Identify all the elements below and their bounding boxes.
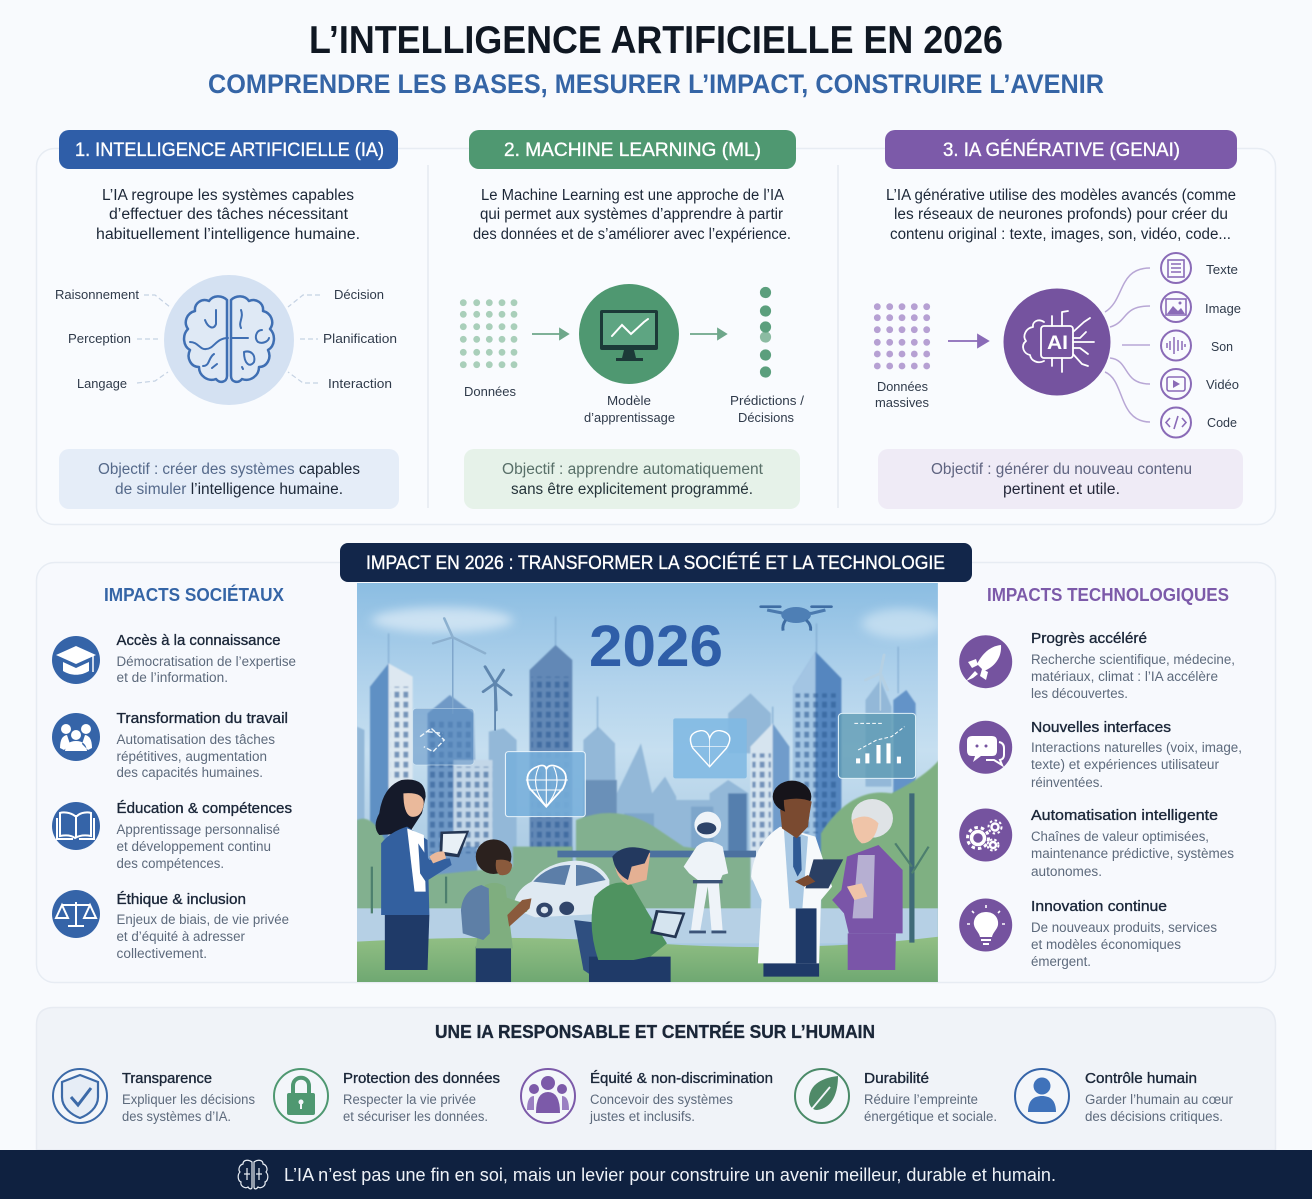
item: continuous innovation <box>959 898 1217 969</box>
item: continuous innovation: De nouveaux produits, services <box>1031 920 1217 935</box>
connectors <box>1105 268 1150 422</box>
icon: video output <box>1161 369 1191 399</box>
principle: fairness: Concevoir des systèmes <box>590 1092 733 1107</box>
diagram: brain with capabilities: Interaction <box>328 376 392 391</box>
item: intelligent automation: autonomes. <box>1031 864 1102 879</box>
heading pill: IA <box>59 130 398 169</box>
icon: sound output <box>1161 330 1191 360</box>
principle: sustainability: Durabilité <box>864 1071 929 1087</box>
text block: IA definition: d’effectuer des tâches nécessitant <box>109 206 349 223</box>
principle: fairness <box>521 1069 773 1124</box>
diagram: brain with capabilities <box>55 275 397 405</box>
item: new interfaces: texte) et expériences utilisateur <box>1031 757 1219 772</box>
text block: IA definition: L’IA regroupe les systèmes capables <box>102 187 354 204</box>
item: intelligent automation: Automatisation intelligente <box>1031 807 1218 824</box>
icon: footer brain <box>238 1160 268 1189</box>
item: ethics: collectivement. <box>116 946 207 961</box>
subtitle: COMPRENDRE LES BASES, MESURER L’IMPACT, CONSTRUIRE L’AVENIR <box>208 69 1104 99</box>
diagram: brain with capabilities: Raisonnement <box>55 287 139 302</box>
heading pill: GenAI <box>885 130 1237 169</box>
heading pill: ML: 2. MACHINE LEARNING (ML) <box>504 139 761 161</box>
text block: IA definition <box>96 187 360 243</box>
road and lawn <box>357 908 939 943</box>
data dots <box>460 299 517 368</box>
diagram: machine learning flow: Décisions <box>738 410 794 425</box>
item: continuous innovation: Innovation continue <box>1031 898 1167 915</box>
item: work transformation: Automatisation des tâches <box>116 732 275 747</box>
icon: text output <box>1161 253 1191 283</box>
item: new interfaces: Interactions naturelles (voix, image, <box>1031 740 1242 755</box>
callout: GenAI objective <box>878 449 1243 509</box>
diagram: machine learning flow: Données <box>464 384 516 399</box>
item: ethics: Éthique & inclusion <box>116 891 246 908</box>
item: work transformation <box>52 710 288 780</box>
item: new interfaces <box>959 719 1242 790</box>
principle: fairness: Équité & non-discrimination <box>590 1070 773 1087</box>
icon: image output <box>1161 292 1191 322</box>
diagram: generative flow: massives <box>875 395 929 410</box>
item: intelligent automation: Chaînes de valeur optimisées, <box>1031 829 1209 844</box>
diagram: brain with capabilities: Perception <box>68 331 131 346</box>
heading pill: GenAI: 3. IA GÉNÉRATIVE (GENAI) <box>943 138 1180 161</box>
item: ethics: et d’équité à adresser <box>116 929 245 944</box>
banner: impact heading <box>340 543 972 582</box>
text block: GenAI definition: contenu original : texte, images, son, vidéo, code... <box>890 226 1231 243</box>
footer banner <box>0 1150 1312 1199</box>
panel: fundamentals <box>36 130 1276 524</box>
diagram: machine learning flow: Modèle <box>607 393 651 408</box>
illustration: city of 2026 <box>357 583 943 982</box>
column: societal impacts <box>52 584 296 961</box>
footer banner: L’IA n’est pas une fin en soi, mais un levier pour construire un avenir meilleur, durable et humain. <box>284 1164 1056 1185</box>
callout: ML objective <box>464 449 800 509</box>
principle: fairness: justes et inclusifs. <box>589 1109 695 1124</box>
diagram: brain with capabilities: Décision <box>334 287 384 302</box>
text block: ML definition: Le Machine Learning est une approche de l’IA <box>481 187 785 204</box>
text block: GenAI definition <box>886 187 1236 243</box>
diagram: machine learning flow <box>460 284 804 425</box>
text block: GenAI definition: les réseaux de neurones profonds) pour créer du <box>894 206 1228 223</box>
massive data dots <box>874 303 930 369</box>
callout: IA objective: Objectif : créer des systèmes capables <box>98 461 360 478</box>
item: access to knowledge: Accès à la connaissance <box>116 632 280 649</box>
item: access to knowledge <box>52 632 296 685</box>
callout: ML objective: sans être explicitement programmé. <box>511 481 753 498</box>
item: education: et développement continu <box>116 839 271 854</box>
icon: AI chip brain: AI <box>1047 333 1068 354</box>
item: ethics <box>52 890 289 961</box>
heading pill: ML <box>469 130 796 169</box>
principle: data protection: et sécuriser les données. <box>343 1109 488 1124</box>
principle: transparency <box>53 1069 255 1124</box>
item: intelligent automation <box>959 807 1234 879</box>
diagram: machine learning flow: Prédictions / <box>730 393 804 408</box>
text block: ML definition: des données et de s’améliorer avec l’expérience. <box>473 226 791 243</box>
principle: transparency: Transparence <box>122 1071 212 1087</box>
icon: model monitor <box>579 284 679 384</box>
column 1: artificial intelligence <box>55 130 399 509</box>
principle: sustainability: Réduire l’empreinte <box>864 1092 978 1107</box>
robot <box>684 812 728 932</box>
text block: IA definition: habituellement l’intelligence humaine. <box>96 226 360 243</box>
heading pill: IA: 1. INTELLIGENCE ARTIFICIELLE (IA) <box>75 139 384 161</box>
icon: brain <box>184 296 274 382</box>
diagram: generative flow: Image <box>1205 301 1241 316</box>
callout: IA objective <box>59 449 399 509</box>
diagram: generative flow: Vidéo <box>1206 377 1239 392</box>
callout: GenAI objective: Objectif : générer du nouveau contenu <box>931 461 1192 478</box>
principle: data protection <box>274 1069 500 1124</box>
holographic panels <box>413 708 916 817</box>
item: accelerated progress: Recherche scientifique, médecine, <box>1031 652 1235 667</box>
diagram: brain with capabilities: Planification <box>323 331 397 346</box>
item: work transformation: Transformation du travail <box>116 710 288 727</box>
item: education: des compétences. <box>116 856 224 871</box>
item: access to knowledge: et de l’information. <box>116 670 228 685</box>
text block: ML definition: qui permet aux systèmes d’apprendre à partir <box>480 206 783 223</box>
diagram: generative flow <box>874 253 1241 438</box>
item: intelligent automation: maintenance prédictive, systèmes <box>1031 846 1234 861</box>
item: ethics: Enjeux de biais, de vie privée <box>116 912 289 927</box>
person: elderly woman <box>832 799 903 970</box>
item: education: Apprentissage personnalisé <box>116 822 280 837</box>
item: accelerated progress: Progrès accéléré <box>1031 630 1147 647</box>
callout: ML objective: Objectif : apprendre automatiquement <box>502 461 764 478</box>
heading: responsible AI: UNE IA RESPONSABLE ET CENTRÉE SUR L’HUMAIN <box>435 1021 875 1042</box>
item: accelerated progress: matériaux, climat : l’IA accélère <box>1031 669 1218 684</box>
item: education: Éducation & compétences <box>116 800 292 817</box>
diagram: generative flow: Son <box>1211 339 1233 354</box>
principle: sustainability <box>795 1069 997 1124</box>
car <box>513 861 609 917</box>
title: L’INTELLIGENCE ARTIFICIELLE EN 2026 <box>309 19 1003 62</box>
person: woman with tablet <box>376 780 469 970</box>
item: new interfaces: réinventées. <box>1031 775 1103 790</box>
far skyline <box>357 680 891 880</box>
illustration year: 2026 <box>589 614 723 679</box>
person: doctor with tablet <box>751 781 843 977</box>
principle: data protection: Protection des données <box>343 1071 500 1087</box>
principle: human control: des décisions critiques. <box>1085 1109 1223 1124</box>
heading: societal: IMPACTS SOCIÉTAUX <box>104 584 285 605</box>
text block: GenAI definition: L’IA générative utilise des modèles avancés (comme <box>886 187 1236 204</box>
principle: sustainability: énergétique et sociale. <box>864 1109 997 1124</box>
column: technological impacts <box>959 584 1242 969</box>
item: accelerated progress: les découvertes. <box>1031 686 1128 701</box>
drone <box>761 607 831 631</box>
item: access to knowledge: Démocratisation de l’expertise <box>116 654 296 669</box>
arrow: data to AI <box>948 335 988 347</box>
item: education <box>52 800 292 871</box>
item: work transformation: des capacités humaines. <box>116 765 263 780</box>
item: continuous innovation: émergent. <box>1031 954 1091 969</box>
panel: impact <box>36 543 1276 982</box>
principle: transparency: des systèmes d’IA. <box>122 1109 231 1124</box>
distant greenery <box>357 812 752 908</box>
callout: GenAI objective: pertinent et utile. <box>1003 481 1120 498</box>
principle: data protection: Respecter la vie privée <box>343 1092 476 1107</box>
prediction dots <box>760 287 771 378</box>
heading: technological: IMPACTS TECHNOLOGIQUES <box>987 584 1229 605</box>
arrow: model to predictions <box>690 329 726 339</box>
wind turbines <box>433 618 888 730</box>
arrow: data to model <box>532 329 568 339</box>
principle: human control: Garder l’humain au cœur <box>1085 1092 1233 1107</box>
banner: impact heading: IMPACT EN 2026 : TRANSFORMER LA SOCIÉTÉ ET LA TECHNOLOGIE <box>366 553 945 574</box>
item: accelerated progress <box>959 630 1235 701</box>
principle: transparency: Expliquer les décisions <box>122 1092 255 1107</box>
person: seated man with tablet <box>574 847 685 982</box>
icon: code output <box>1161 408 1191 438</box>
icon: AI chip brain <box>1004 288 1110 396</box>
principle: human control: Contrôle humain <box>1085 1071 1197 1087</box>
callout: IA objective: de simuler l’intelligence humaine. <box>115 481 343 498</box>
person: child with backpack <box>461 839 531 982</box>
panel: responsible AI <box>36 1008 1276 1150</box>
diagram: machine learning flow: d’apprentissage <box>584 410 675 425</box>
item: continuous innovation: et modèles économiques <box>1031 937 1181 952</box>
column 3: generative AI <box>874 130 1243 509</box>
item: new interfaces: Nouvelles interfaces <box>1031 719 1171 736</box>
principle: human control <box>1015 1069 1233 1124</box>
towers <box>387 663 414 836</box>
diagram: generative flow: Données <box>877 379 928 394</box>
item: work transformation: répétitives, augmentation <box>116 749 267 764</box>
diagram: generative flow: Texte <box>1206 262 1238 277</box>
text block: ML definition <box>473 187 791 243</box>
column 2: machine learning <box>460 130 804 509</box>
diagram: brain with capabilities: Langage <box>77 376 127 391</box>
diagram: generative flow: Code <box>1207 415 1237 430</box>
